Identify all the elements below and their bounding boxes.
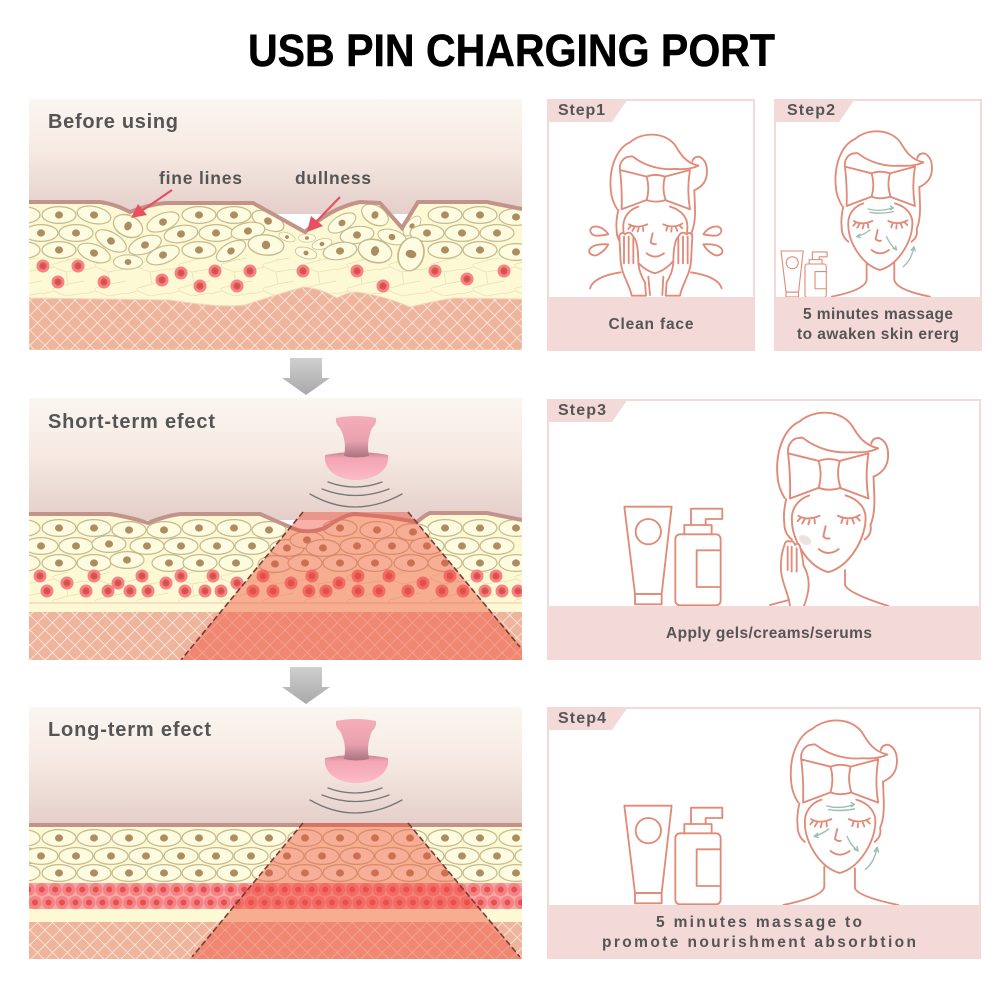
skin cells bbox=[6, 830, 549, 881]
neck bbox=[783, 867, 898, 905]
panel: long-term effect bbox=[6, 707, 549, 959]
dermis collagen mesh bbox=[29, 612, 522, 660]
epidermis layer bbox=[29, 825, 522, 925]
illustration: face massage bbox=[832, 131, 932, 297]
red blood cell band bbox=[29, 883, 522, 909]
dermis collagen mesh bbox=[29, 287, 522, 350]
dashed cone edges bbox=[181, 512, 520, 660]
panel: step 2 bbox=[774, 99, 982, 351]
treatment cone highlight bbox=[190, 823, 522, 959]
illustration: washing face head bbox=[610, 135, 707, 273]
lower epidermis cell net bbox=[29, 572, 522, 602]
caption bar bbox=[547, 905, 981, 959]
icon: products bbox=[624, 806, 722, 904]
icon: products bbox=[624, 507, 722, 605]
red blood cells bbox=[34, 570, 524, 598]
heading: Before using bbox=[48, 111, 178, 133]
caption: promote nourishment absorbtion bbox=[602, 934, 916, 951]
sky background bbox=[29, 707, 522, 825]
step tab bbox=[547, 99, 628, 122]
skin surface line bbox=[29, 823, 522, 827]
caption bbox=[602, 914, 916, 951]
caption: 5 minutes massage to bbox=[656, 914, 862, 931]
arrow: dullness bbox=[307, 197, 340, 232]
sky background bbox=[29, 99, 522, 214]
illustration: applying cream bbox=[777, 413, 888, 572]
red blood cells bbox=[36, 260, 510, 292]
hand and neck bbox=[770, 533, 888, 607]
panel: before using bbox=[6, 99, 533, 350]
arrow: down 1 bbox=[282, 358, 330, 395]
caption: to awaken skin ererg bbox=[797, 326, 959, 343]
dermis collagen mesh bbox=[29, 922, 522, 959]
illustration: massage for absorption bbox=[791, 720, 897, 873]
skin surface line bbox=[29, 202, 522, 232]
treatment cone highlight bbox=[181, 512, 522, 660]
caption bar bbox=[547, 606, 981, 660]
heading: Short-term efect bbox=[48, 411, 215, 433]
step tab bbox=[774, 99, 855, 122]
arrow: fine lines bbox=[131, 190, 172, 218]
dashed cone edges bbox=[192, 823, 520, 957]
vibration waves bbox=[310, 482, 402, 507]
frame bbox=[775, 100, 981, 350]
panel: short-term effect bbox=[6, 398, 533, 660]
caption bar bbox=[774, 297, 982, 351]
caption bbox=[797, 306, 959, 343]
skin cells bbox=[6, 520, 533, 572]
frame bbox=[548, 400, 980, 659]
panel: step 4 bbox=[547, 707, 981, 959]
caption: Clean face bbox=[608, 316, 694, 333]
panel: step 3 bbox=[547, 399, 981, 660]
icon: products small bbox=[781, 251, 827, 297]
lower epidermis cell net bbox=[29, 258, 522, 296]
step label: Step3 bbox=[558, 402, 606, 419]
skin cells bbox=[29, 204, 522, 272]
step label: Step2 bbox=[787, 102, 835, 119]
panel: step 1 bbox=[547, 99, 755, 351]
caption bar bbox=[547, 297, 755, 351]
label: dullness: dullness bbox=[295, 168, 371, 188]
epidermis layer bbox=[29, 202, 522, 310]
heading: Long-term efect bbox=[48, 719, 211, 741]
epidermis layer bbox=[29, 513, 522, 620]
illustration: hands, shoulders and water drops bbox=[589, 226, 722, 296]
caption: Apply gels/creams/serums bbox=[666, 625, 872, 642]
title: USB PIN CHARGING PORT bbox=[248, 25, 775, 76]
icon: massage device bbox=[325, 719, 388, 783]
pale band line bbox=[29, 602, 522, 604]
frame bbox=[548, 100, 754, 350]
step tab bbox=[547, 399, 628, 422]
skin surface line bbox=[29, 513, 522, 531]
vibration waves bbox=[310, 788, 402, 813]
label: fine lines: fine lines bbox=[159, 168, 242, 188]
caption: 5 minutes massage bbox=[803, 306, 953, 323]
step label: Step4 bbox=[558, 710, 606, 727]
sky background bbox=[29, 398, 522, 520]
step tab bbox=[547, 707, 628, 730]
frame bbox=[548, 708, 980, 958]
icon: massage device bbox=[325, 416, 388, 480]
step label: Step1 bbox=[558, 102, 605, 119]
arrow: down 2 bbox=[282, 667, 330, 704]
